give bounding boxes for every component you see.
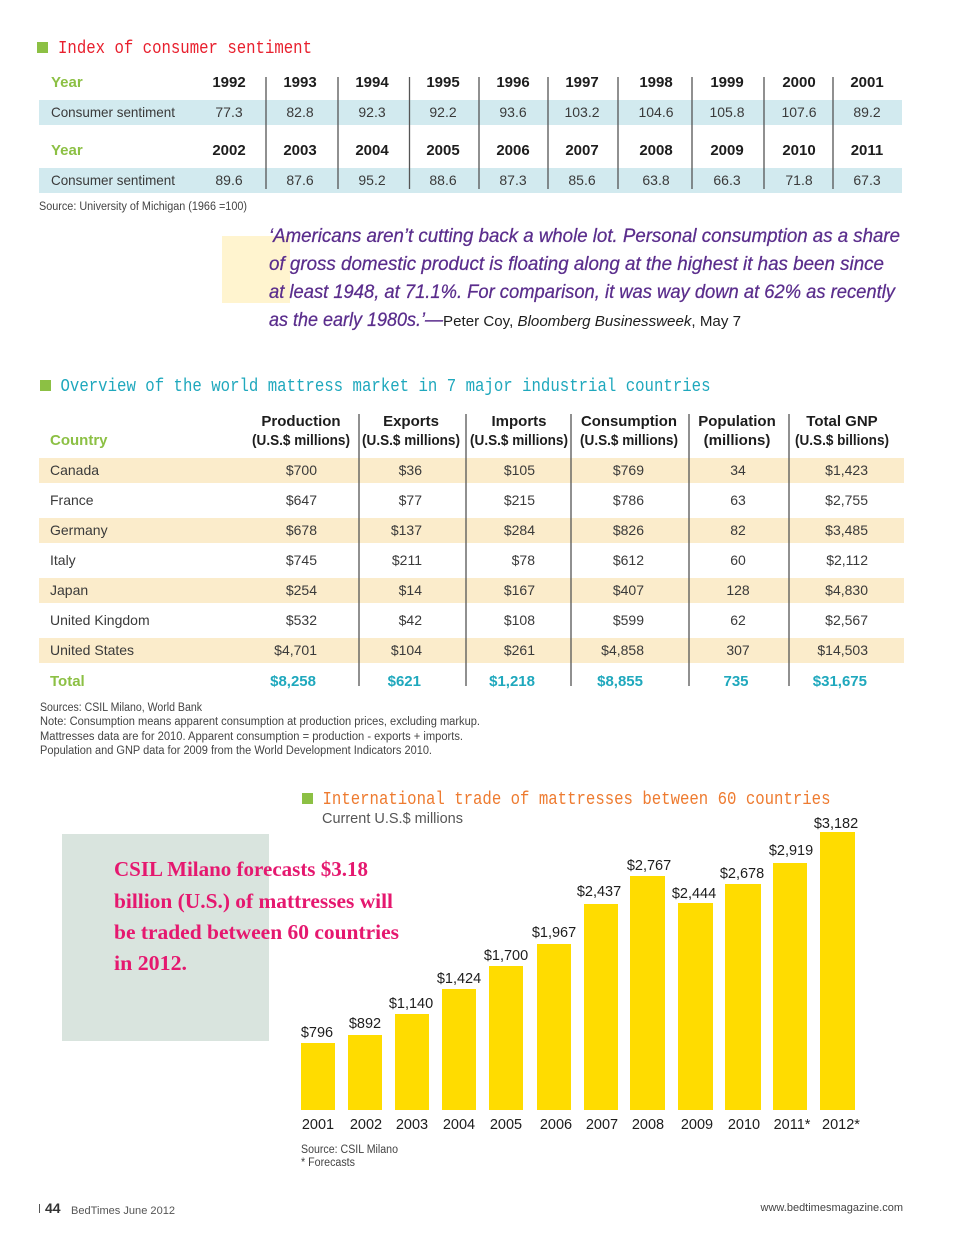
chart source note: Source: CSIL Milano	[301, 1144, 398, 1156]
bar value labels: $796	[301, 1025, 333, 1041]
callout: CSIL forecast	[62, 834, 399, 1041]
row: United States: United States	[50, 642, 134, 658]
year axis labels: 2001	[302, 1117, 334, 1133]
row: Japan: $167	[504, 582, 535, 598]
table: sentiment 1992 to 2011: 89.6	[215, 172, 243, 188]
row: United States: $104	[391, 642, 422, 658]
chart source note	[301, 1144, 398, 1169]
table: sentiment 1992 to 2011: 2007	[565, 142, 599, 159]
row: Japan: $254	[286, 582, 317, 598]
row: Canada: 34	[730, 462, 746, 478]
row: United Kingdom: 62	[730, 612, 746, 628]
heading: index of consumer sentiment: Index of consumer sentiment	[58, 39, 312, 59]
row: Italy: $612	[613, 552, 644, 568]
year axis labels: 2012*	[822, 1117, 860, 1133]
pull quote: as the early 1980s.’—	[269, 310, 444, 331]
bar chart	[301, 816, 860, 1133]
row: Italy: $78	[512, 552, 535, 568]
row: Canada: $769	[613, 462, 644, 478]
table: sentiment 1992 to 2011: Consumer sentiment	[51, 104, 175, 120]
footer	[39, 1200, 903, 1217]
row: Italy: $211	[392, 552, 422, 568]
pull quote: at least 1948, at 71.1%. For comparison, it was way down at 62% as recently	[269, 282, 896, 303]
bar value labels: $1,140	[389, 996, 433, 1012]
panel: international trade chart	[301, 790, 860, 1169]
row: Germany: Germany	[50, 522, 108, 538]
year axis labels: 2007	[586, 1117, 618, 1133]
column headers: Population	[698, 413, 776, 430]
table: sentiment 1992 to 2011: 1996	[496, 74, 530, 91]
table: sentiment 1992 to 2011: 2003	[283, 142, 317, 159]
column headers: (U.S.$ millions)	[252, 432, 350, 449]
bar value labels: $2,444	[672, 886, 716, 902]
table: sentiment 1992 to 2011: Year	[51, 74, 83, 91]
table: sentiment 1992 to 2011: 2008	[639, 142, 673, 159]
source notes: Note: Consumption means apparent consumption at production prices, excluding markup.	[40, 716, 480, 728]
row: Total: 735	[723, 673, 749, 690]
table: sentiment 1992 to 2011: 2004	[355, 142, 389, 159]
table: sentiment 1992 to 2011: 82.8	[286, 104, 314, 120]
row: Total: Total	[50, 673, 85, 690]
row: United States: $4,701	[274, 642, 317, 658]
column headers: Imports	[491, 413, 547, 430]
table: sentiment 1992 to 2011: 89.2	[853, 104, 881, 120]
row: Japan: 128	[726, 582, 750, 598]
source note: University of Michigan: Source: University of Michigan (1966 =100)	[39, 201, 247, 213]
table: sentiment 1992 to 2011: 87.6	[286, 172, 314, 188]
year axis labels: 2002	[350, 1117, 382, 1133]
row: Italy	[50, 552, 868, 568]
pull quote: of gross domestic product is floating along at the highest it has been since	[269, 254, 884, 275]
row: France: $2,755	[825, 492, 868, 508]
heading: international trade of mattresses: International trade of mattresses between 60 countries	[322, 790, 830, 810]
table: sentiment 1992 to 2011: 2005	[426, 142, 460, 159]
row: United Kingdom: $108	[504, 612, 535, 628]
row: France: $77	[399, 492, 422, 508]
table: sentiment 1992 to 2011: 105.8	[709, 104, 745, 120]
row: United States	[50, 642, 868, 658]
table: sentiment 1992 to 2011: 2009	[710, 142, 744, 159]
year axis labels: 2005	[490, 1117, 522, 1133]
pull quote	[222, 226, 900, 331]
bar value labels: $1,700	[484, 948, 528, 964]
table: sentiment 1992 to 2011: 104.6	[638, 104, 674, 120]
row: France: $786	[613, 492, 644, 508]
row: Total: $621	[388, 673, 421, 690]
table: sentiment 1992 to 2011: 87.3	[499, 172, 527, 188]
year axis labels: 2006	[540, 1117, 572, 1133]
table: sentiment 1992 to 2011: 66.3	[713, 172, 741, 188]
row: France	[50, 492, 868, 508]
table: sentiment 1992 to 2011: 2000	[782, 74, 816, 91]
table: sentiment 1992 to 2011: 85.6	[568, 172, 596, 188]
row: United States: 307	[726, 642, 750, 658]
bar value labels: $2,437	[577, 884, 621, 900]
row: Germany: 82	[730, 522, 746, 538]
row: Germany: $3,485	[825, 522, 868, 538]
row: Japan: $14	[399, 582, 422, 598]
column headers: (U.S.$ billions)	[795, 432, 889, 449]
row: United Kingdom	[50, 612, 868, 628]
bar value labels: $3,182	[814, 816, 858, 832]
row: Total	[50, 673, 867, 690]
table: sentiment 1992 to 2011: 103.2	[564, 104, 600, 120]
table: sentiment 1992 to 2011: 93.6	[499, 104, 527, 120]
bar value labels: $1,424	[437, 971, 481, 987]
row: Canada: $105	[504, 462, 535, 478]
callout: CSIL forecast: be traded between 60 countries	[114, 920, 399, 944]
table: sentiment 1992 to 2011: 1998	[639, 74, 673, 91]
row: United Kingdom: United Kingdom	[50, 612, 150, 628]
row: Canada	[50, 462, 868, 478]
column headers: Exports	[383, 413, 439, 430]
row: Total: $31,675	[813, 673, 867, 690]
year axis labels	[302, 1117, 860, 1133]
bar value labels	[301, 816, 858, 1041]
row: United Kingdom: $532	[286, 612, 317, 628]
row: United States: $14,503	[817, 642, 868, 658]
row: Japan: Japan	[50, 582, 88, 598]
row: Germany: $678	[286, 522, 317, 538]
table: sentiment 1992 to 2011: 67.3	[853, 172, 881, 188]
table: sentiment 1992 to 2011: 1999	[710, 74, 744, 91]
pull quote: ‘Americans aren’t cutting back a whole lot. Personal consumption as a share	[269, 226, 900, 247]
bar value labels: $2,678	[720, 866, 764, 882]
row: Italy: $745	[286, 552, 317, 568]
row: United Kingdom: $42	[399, 612, 422, 628]
column headers: Total GNP	[806, 413, 878, 430]
callout: CSIL forecast: billion (U.S.) of mattresses will	[114, 889, 393, 913]
column headers: (millions)	[704, 432, 770, 449]
row: Total: $1,218	[489, 673, 535, 690]
bar value labels: $892	[349, 1016, 381, 1032]
row: France: France	[50, 492, 94, 508]
row: Canada: $1,423	[825, 462, 868, 478]
table: sentiment 1992 to 2011: 107.6	[781, 104, 817, 120]
row: United States: $4,858	[601, 642, 644, 658]
row: France: 63	[730, 492, 746, 508]
year axis labels: 2008	[632, 1117, 664, 1133]
row: Germany: $284	[504, 522, 535, 538]
column headers: Consumption	[581, 413, 677, 430]
bar value labels: $1,967	[532, 925, 576, 941]
chart source note: * Forecasts	[301, 1157, 355, 1169]
row: United States: $261	[504, 642, 535, 658]
bar value labels: $2,767	[627, 858, 671, 874]
row: Germany	[50, 522, 868, 538]
row: Japan: $4,830	[825, 582, 868, 598]
panel: world mattress market	[39, 377, 904, 757]
table: sentiment 1992 to 2011: 71.8	[785, 172, 813, 188]
column headers: Production	[261, 413, 341, 430]
row: Japan: $407	[613, 582, 644, 598]
year axis labels: 2011*	[774, 1117, 811, 1133]
source notes	[40, 702, 480, 757]
table: sentiment 1992 to 2011: Year	[51, 142, 83, 159]
row: France: $647	[286, 492, 317, 508]
footer: www.bedtimesmagazine.com	[760, 1202, 903, 1214]
table: sentiment 1992 to 2011: 2011	[851, 142, 883, 159]
pull quote: Peter Coy, Bloomberg Businessweek, May 7	[443, 313, 741, 330]
row: Italy: Italy	[50, 552, 76, 568]
row: Total: $8,855	[597, 673, 643, 690]
heading: international trade of mattresses: Current U.S.$ millions	[322, 810, 463, 827]
row: France: $215	[504, 492, 535, 508]
panel: consumer sentiment	[37, 39, 902, 213]
table: sentiment 1992 to 2011: 2010	[782, 142, 816, 159]
row: United Kingdom: $2,567	[825, 612, 868, 628]
column headers: Country	[50, 432, 108, 449]
row: Italy: $2,112	[826, 552, 868, 568]
table: sentiment 1992 to 2011: 92.2	[429, 104, 457, 120]
row: Japan	[50, 582, 868, 598]
table: sentiment 1992 to 2011: 1997	[565, 74, 599, 91]
table: sentiment 1992 to 2011: 2006	[496, 142, 530, 159]
table: sentiment 1992 to 2011: Consumer sentiment	[51, 172, 175, 188]
column headers: (U.S.$ millions)	[362, 432, 460, 449]
table: sentiment 1992 to 2011: 2002	[212, 142, 246, 159]
heading: overview of the world mattress market: Overview of the world mattress market in 7 major industrial countries	[60, 377, 710, 397]
table: sentiment 1992 to 2011: 88.6	[429, 172, 457, 188]
row: Canada: Canada	[50, 462, 99, 478]
table: sentiment 1992 to 2011	[39, 74, 902, 193]
footer: 44	[45, 1200, 61, 1216]
callout: CSIL forecast: in 2012.	[114, 951, 187, 975]
table: sentiment 1992 to 2011: 1992	[212, 74, 246, 91]
table: mattress market by country	[39, 413, 904, 690]
row: Canada: $36	[399, 462, 422, 478]
row: Germany: $826	[613, 522, 644, 538]
row: Canada: $700	[286, 462, 317, 478]
source notes: Population and GNP data for 2009 from the World Development Indicators 2010.	[40, 745, 432, 757]
year axis labels: 2009	[681, 1117, 713, 1133]
bar value labels: $2,919	[769, 843, 813, 859]
heading: international trade of mattresses	[302, 790, 830, 827]
year axis labels: 2004	[443, 1117, 475, 1133]
table: sentiment 1992 to 2011: 77.3	[215, 104, 243, 120]
table: sentiment 1992 to 2011: 63.8	[642, 172, 670, 188]
year axis labels: 2003	[396, 1117, 428, 1133]
row: Italy: 60	[730, 552, 746, 568]
column headers: (U.S.$ millions)	[470, 432, 568, 449]
row: Germany: $137	[391, 522, 422, 538]
row: United Kingdom: $599	[613, 612, 644, 628]
footer: BedTimes June 2012	[71, 1205, 175, 1217]
source notes: Sources: CSIL Milano, World Bank	[40, 702, 202, 714]
table: sentiment 1992 to 2011: 92.3	[358, 104, 386, 120]
column headers	[50, 413, 889, 449]
column headers: (U.S.$ millions)	[580, 432, 678, 449]
table: sentiment 1992 to 2011: 1995	[426, 74, 460, 91]
table: sentiment 1992 to 2011: 1994	[355, 74, 389, 91]
table: sentiment 1992 to 2011: 95.2	[358, 172, 386, 188]
row: Total: $8,258	[270, 673, 316, 690]
table: sentiment 1992 to 2011: 2001	[850, 74, 884, 91]
source notes: Mattresses data are for 2010. Apparent consumption = production - exports + imports.	[40, 731, 463, 743]
year axis labels: 2010	[728, 1117, 760, 1133]
callout: CSIL forecast: CSIL Milano forecasts $3.18	[114, 857, 368, 881]
table: sentiment 1992 to 2011: 1993	[283, 74, 317, 91]
